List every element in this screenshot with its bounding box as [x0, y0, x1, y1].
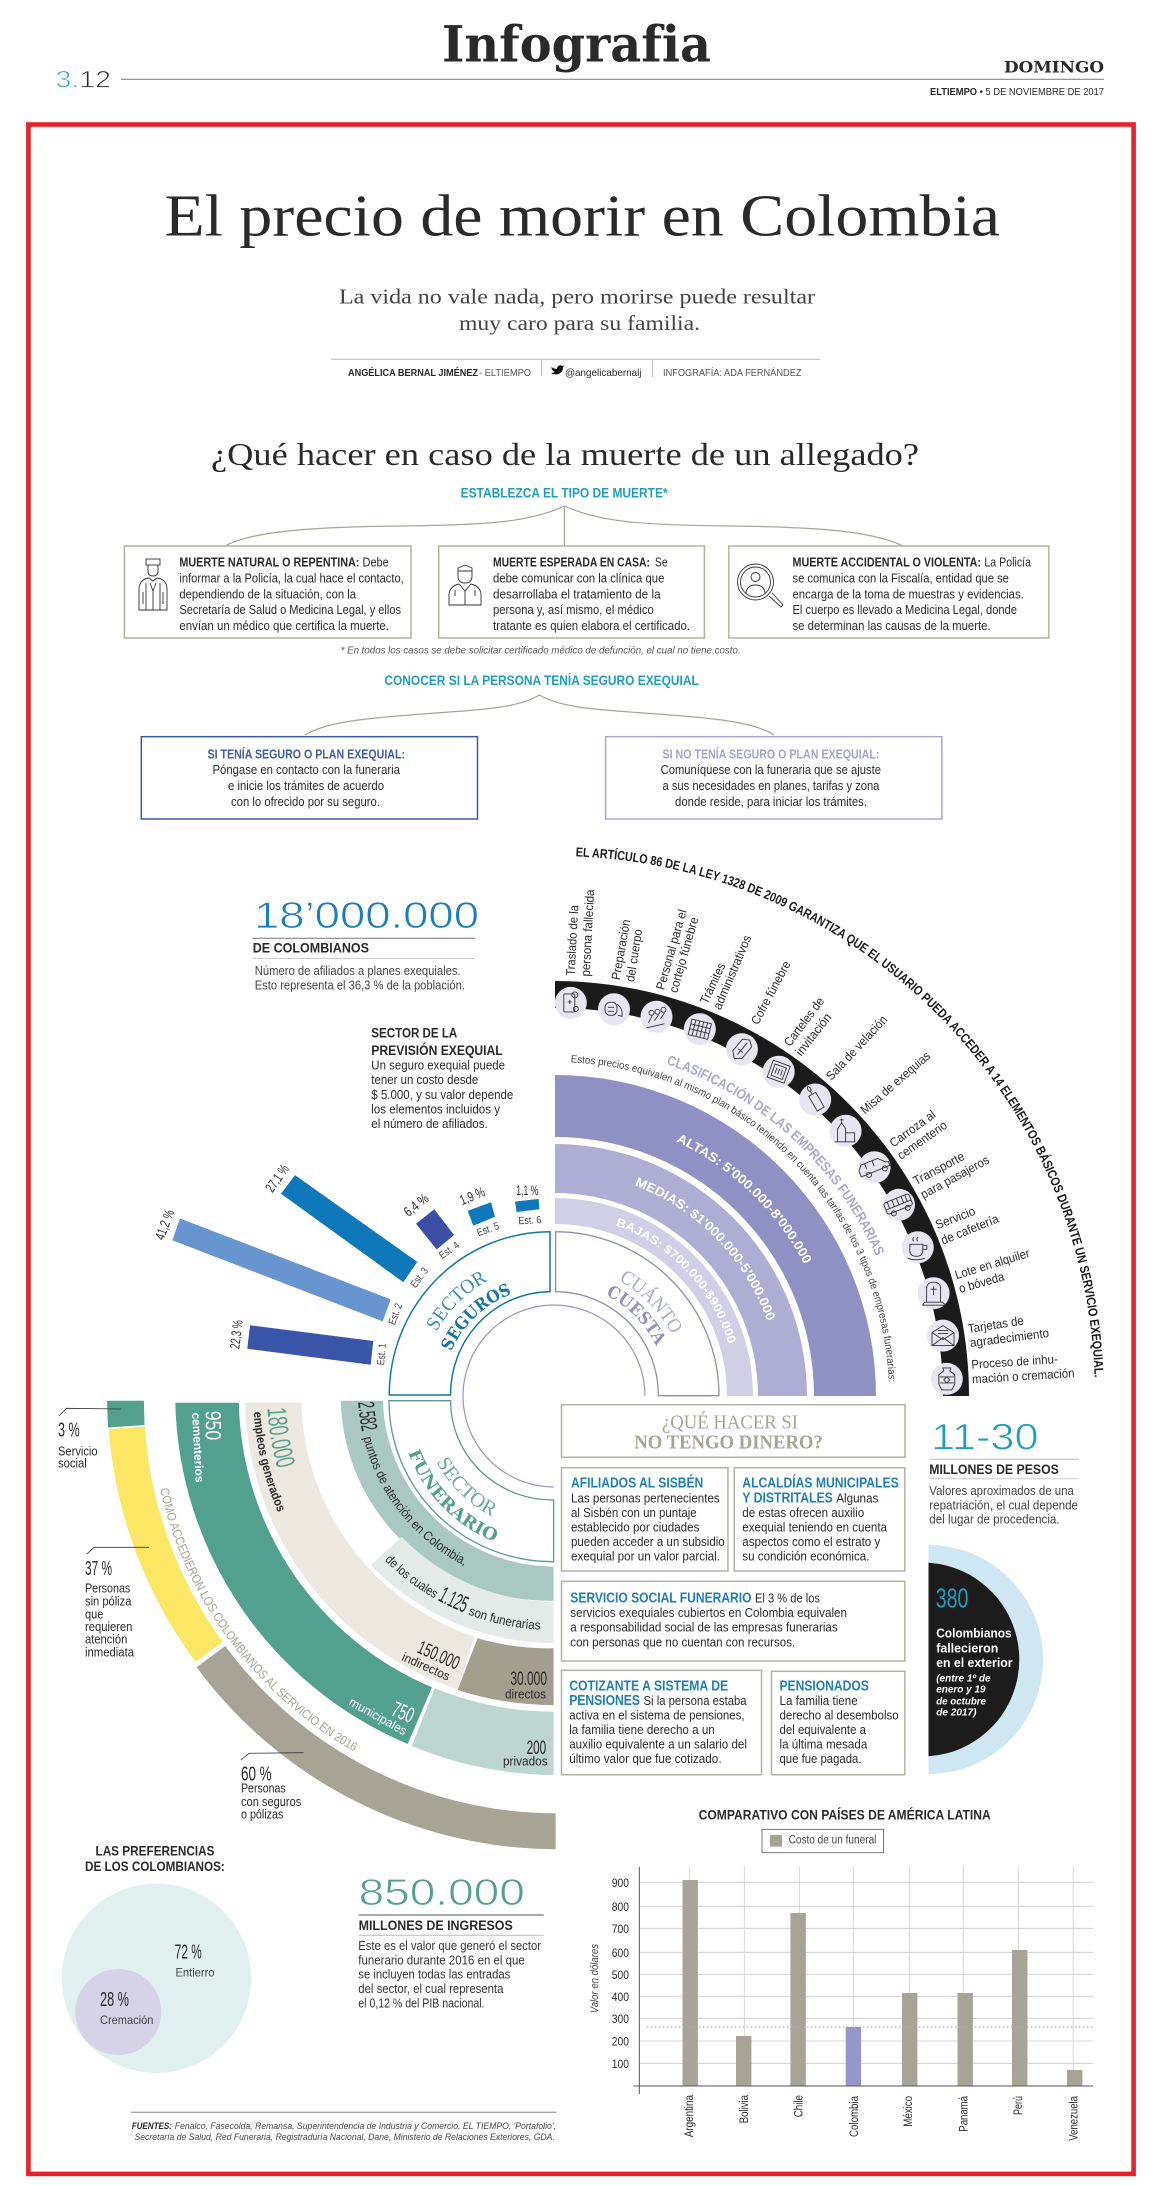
ring: empleos generados [245, 1402, 554, 1705]
panel: con seguro: con lo ofrecido por su seguro. [231, 795, 380, 809]
label: preparación [609, 918, 645, 983]
y axis title: Valor en dólares [589, 1944, 601, 2013]
connector: two branches [305, 695, 774, 735]
callout: 3 %: social [58, 1457, 87, 1471]
panel: muerte esperada: debe comunicar con la clínica que [493, 572, 664, 586]
icon: traslado [555, 987, 587, 1019]
stat: 850.000 millones: del sector, el cual representa [358, 1982, 503, 1996]
sector: funerario: FUNERARIO [408, 1448, 498, 1540]
stat: 11-30 millones [929, 1416, 1079, 1527]
box: pensionados: que fue pagada. [780, 1751, 862, 1766]
icon: tarjeta [927, 1320, 959, 1352]
half circle: 380 colombianos: de 2017) [936, 1707, 977, 1719]
byline [331, 359, 820, 379]
text: sector previsión exequial [371, 1026, 513, 1131]
ring: cementerios: 750 [388, 1696, 418, 1728]
footnote: * En todos los casos se debe solicitar certificado médico de defunción, el cual no tiene costo. [341, 644, 741, 656]
label: trámites: administrativos [710, 933, 754, 1012]
y axis labels: 300 [612, 2014, 629, 2026]
day label: DOMINGO [1004, 58, 1104, 77]
icon: twitter bird [550, 365, 564, 374]
box: cotizante: Si la persona estaba [644, 1693, 747, 1708]
stat: 18 millones: Número de afiliados a planes exequiales. [255, 964, 461, 978]
rings: costos [555, 1075, 876, 1396]
y axis labels: 800 [612, 1902, 629, 1914]
half circle: 380 colombianos: en el exterior [936, 1656, 1013, 1670]
ring: puntos de atención: son funerarias [468, 1608, 540, 1630]
sector: funerario [388, 1400, 554, 1562]
sources: Fenalco, Fasecolda, Remansa, Superintendencia de Industria y Comercio, EL TIEMPO, 'Portafolio', [175, 2121, 556, 2132]
icon: preparación [598, 993, 630, 1025]
stat: 18 millones: DE COLOMBIANOS [253, 941, 369, 956]
panel: muerte accidental: se comunica con la Fiscalía, entidad que se [792, 572, 1009, 586]
label: tarjetas: agradecimiento [969, 1326, 1050, 1350]
half circle: 380 colombianos: enero y 19 [936, 1684, 986, 1696]
box: servicio social funerario: con personas que no cuentan con recursos. [570, 1634, 795, 1649]
ring: cómo accedieron: CÓMO ACCEDIERON LOS COLOMBIANOS AL SERVICIO EN 2016 [160, 1488, 358, 1750]
label: lote [953, 1246, 1031, 1296]
callout: 37 %: 37 % [85, 1558, 112, 1580]
sector: cuánto cuesta: CUÁNTO [622, 1272, 682, 1332]
center arc [463, 1305, 645, 1487]
callout: 37 %: atención [85, 1633, 127, 1647]
y axis labels: 100 [612, 2059, 629, 2071]
ring: medias [555, 1144, 807, 1396]
box: afiliados al sisbén: al Sisbén con un puntaje [571, 1505, 697, 1520]
panel: con seguro: Póngase en contacto con la funeraria [212, 763, 400, 777]
heading: qué hacer: ¿Qué hacer en caso de la muerte de un allegado? [211, 436, 919, 472]
ring: empleos generados: 180.000 [268, 1408, 295, 1467]
bar: estrato 4 [400, 1190, 462, 1262]
circle: cremación [75, 1969, 161, 2055]
box: alcaldías: su condición económica. [742, 1549, 870, 1564]
label: proceso [971, 1352, 1075, 1386]
panel: muerte natural: Debe [362, 556, 389, 570]
label: cafetería: de cafetería [939, 1212, 1001, 1247]
country labels: Argentina [684, 2094, 696, 2137]
box: servicio social funerario: El 3 % de los [755, 1591, 820, 1606]
subtitle: La vida no vale nada, pero morirse puede resultar [339, 284, 815, 308]
icon: lápida [918, 1277, 950, 1309]
panel: muerte natural: dependiendo de la situación, con la [179, 587, 356, 601]
panel: sin seguro [606, 737, 942, 819]
ring: puntos de atención: puntos de atención en Colombia, [361, 1436, 464, 1566]
panel: qué hacer si no tengo dinero [562, 1405, 905, 1775]
panel: muerte natural: informar a la Policía, la cual hace el contacto, [179, 572, 404, 586]
sector: cuánto cuesta [555, 1231, 720, 1396]
ring: medias: MEDIAS: $1'000.000-5'000.000 [635, 1177, 775, 1320]
label: traslado [564, 889, 597, 977]
chart: preferencias: LAS PREFERENCIAS [96, 1843, 214, 1859]
box: cotizante: auxilio equivalente a un salario del [569, 1737, 747, 1752]
box: pensionados: PENSIONADOS [780, 1679, 869, 1695]
box: cotizante: COTIZANTE A SISTEMA DE [569, 1679, 728, 1695]
ring: altas: ALTAS: 5'000.000-8'000.000 [676, 1135, 811, 1263]
label: trámites: Trámites [697, 961, 728, 1006]
bar: estrato 6: Est. 6 [518, 1214, 542, 1227]
icon: urna [931, 1363, 963, 1395]
stat: 18 millones [252, 895, 479, 992]
country labels: Panamá [959, 2096, 971, 2132]
label: transporte: para pasajeros [918, 1153, 992, 1202]
ring: altas [555, 1075, 876, 1396]
date label: ELTIEMPO • 5 DE NOVIEMBRE DE 2017 [930, 87, 1104, 98]
heading box: NO TENGO DINERO? [634, 1431, 823, 1453]
box: alcaldías: de estas ofrecen auxilio [742, 1505, 864, 1520]
box: cotizante: último valor que fue cotizado. [569, 1751, 722, 1766]
sector: seguros: SECTOR [427, 1272, 488, 1330]
axes [634, 1867, 1093, 2094]
box: afiliados al sisbén: AFILIADOS AL SISBÉN [571, 1475, 703, 1492]
half circle: 380 colombianos: de octubre [936, 1695, 986, 1707]
text: sector previsión exequial: los elementos incluidos y [371, 1102, 501, 1116]
label: cofre: Cofre fúnebre [748, 958, 794, 1027]
country labels: Bolivia [739, 2095, 751, 2123]
callout: 60 %: o pólizas [241, 1807, 283, 1821]
bar: estrato 1: 22,3 % [226, 1319, 246, 1350]
chart: preferencias: DE LOS COLOMBIANOS: [85, 1858, 225, 1874]
box: pensionados [772, 1671, 905, 1775]
icon: personal [640, 1001, 672, 1033]
label: personal: Personal para el [653, 908, 690, 991]
ring: empleos generados: 30.000 [510, 1669, 547, 1690]
box: afiliados al sisbén: pueden acceder a un subsidio [571, 1534, 725, 1549]
callout: 60 % [241, 1753, 304, 1821]
y axis labels: 400 [612, 1992, 629, 2004]
half circle: 380 colombianos: 380 [936, 1582, 968, 1613]
panel: muerte accidental: se determinan las causas de la muerte. [792, 619, 991, 633]
grid [639, 1867, 1093, 2086]
circle: cremación: 28 % [100, 1989, 129, 2011]
panel: muerte natural: Secretaría de Salud o Medicina Legal, y ellos [179, 603, 401, 617]
ring: bajas [555, 1198, 753, 1396]
bar: estrato 3: 27,1 % [262, 1161, 292, 1195]
sector: cuánto cuesta: CUESTA [608, 1286, 664, 1346]
bar: estrato 2: 41,2 % [151, 1207, 177, 1242]
box: afiliados al sisbén: establecido por ciudades [571, 1520, 700, 1535]
stat: 11-30 millones: 11-30 [931, 1416, 1038, 1457]
sector: seguros: SEGUROS [441, 1284, 510, 1350]
heading: artículo 86 curved: EL ARTÍCULO 86 DE LA LEY 1328 DE 2009 GARANTIZA QUE EL USUARIO PUEDA ACCEDER A 14 ELEMENTOS BÁSICOS DURANTE UN SERVICIO EXEQUIAL. [576, 848, 1104, 1377]
box: alcaldías: Y DISTRITALES [742, 1490, 833, 1506]
ring: puntos de atención: de los cuales [386, 1556, 437, 1598]
box: afiliados al sisbén: Las personas pertenecientes [571, 1491, 720, 1506]
icon: vela [793, 1078, 837, 1121]
callout: 37 % [85, 1547, 149, 1659]
icon: iglesia [830, 1115, 862, 1147]
panel: muerte natural [124, 546, 411, 638]
ring: cementerios: privados [503, 1754, 548, 1769]
bar: estrato 5: 1,9 % [457, 1183, 487, 1208]
legend: Costo de un funeral [789, 1834, 876, 1846]
heading: clasificación curved: CLASIFICACIÓN DE LAS EMPRESAS FUNERARIAS [668, 1056, 884, 1256]
stat: 850.000 millones: MILLONES DE INGRESOS [359, 1918, 513, 1933]
y axis labels: 600 [612, 1948, 629, 1960]
label: cafetería: Servicio [933, 1204, 977, 1232]
label: carroza: Carroza al [887, 1107, 938, 1150]
panel: con seguro: e inicie los trámites de acuerdo [228, 779, 384, 793]
panel: muerte esperada: persona y, así mismo, el médico [493, 603, 654, 617]
label: tarjetas: Tarjetas de [967, 1314, 1025, 1336]
half circle: 380 colombianos: Colombianos [936, 1627, 1012, 1641]
box: cotizante [562, 1670, 762, 1775]
icon: bus [878, 1184, 920, 1226]
ring: empleos generados: empleos generados [252, 1412, 284, 1512]
callout: 37 %: Personas [85, 1582, 130, 1596]
y axis labels: 200 [612, 2036, 629, 2048]
icons: fourteen elements [555, 987, 963, 1395]
chart: estratos radial bars [151, 1161, 542, 1366]
label: lote: o bóveda [957, 1270, 1006, 1296]
stat: 850.000 millones: el 0,12 % del PIB nacional. [358, 1996, 484, 2010]
panel: muerte esperada: Se [655, 556, 668, 570]
label: transporte: Transporte [911, 1149, 967, 1188]
box: pensionados: la última mesada [780, 1737, 868, 1752]
heading box [562, 1405, 905, 1457]
callout: 60 %: con seguros [241, 1795, 301, 1809]
ring: puntos de atención: 2.582 [358, 1402, 378, 1432]
callout: 60 %: Personas [241, 1782, 286, 1796]
box: servicio social funerario [562, 1581, 905, 1661]
stat: 850.000 millones: funerario durante 2016 en el que [358, 1953, 525, 1967]
bars [682, 1880, 1082, 2086]
connector: three branches [225, 506, 903, 546]
y axis labels: 900 [612, 1878, 629, 1890]
label: proceso: Proceso de inhu- [971, 1352, 1058, 1372]
callout: 37 %: que [85, 1607, 103, 1621]
box: servicio social funerario: SERVICIO SOCIAL FUNERARIO [570, 1591, 752, 1607]
country labels: Perú [1013, 2096, 1025, 2115]
stat: 11-30 millones: repatriación, el cual depende [929, 1498, 1078, 1512]
circle: cremación: Cremación [100, 2013, 153, 2027]
chart: comparativo américa latina [589, 1806, 1093, 2141]
ring: cementerios: cementerios [189, 1412, 207, 1483]
stat: 850.000 millones: Este es el valor que generó el sector [358, 1939, 541, 1953]
label: preparación: del cuerpo [623, 928, 645, 983]
byline: - ELTIEMPO [479, 367, 531, 379]
callout: 60 %: 60 % [241, 1764, 272, 1786]
ring: empleos generados: indirectos [400, 1650, 452, 1683]
panel: muerte accidental: El cuerpo es llevado a Medicina Legal, donde [792, 603, 1017, 617]
half circle: 380 colombianos: (entre 1º de [936, 1673, 991, 1685]
subtitle: muy caro para su familia. [459, 311, 700, 335]
box: afiliados al sisbén [562, 1468, 728, 1571]
panel: sin seguro: donde reside, para iniciar los trámites. [675, 795, 867, 809]
byline: INFOGRAFÍA: ADA FERNÁNDEZ [663, 366, 802, 379]
sources: Secretaría de Salud, Red Funeraria, Registraduría Nacional, Dane, Ministerio de Relaciones Exteriores, GDA. [134, 2132, 555, 2143]
bar: estrato 5 [457, 1183, 501, 1239]
panel: muerte esperada: MUERTE ESPERADA EN CASA: [493, 556, 650, 570]
byline: ANGÉLICA BERNAL JIMÉNEZ [348, 366, 479, 379]
text: sector previsión exequial: tener un costo desde [371, 1073, 478, 1087]
label: traslado: Traslado de la [564, 905, 581, 976]
panel: muerte natural: envían un médico que certifica la muerte. [179, 619, 389, 633]
subtitle [339, 284, 815, 335]
panel: muerte natural: MUERTE NATURAL O REPENTINA: [179, 556, 359, 570]
sources: FUENTES: [132, 2121, 172, 2132]
bar: estrato 3: Est. 3 [408, 1265, 431, 1290]
stat: 850.000 millones: 850.000 [359, 1872, 525, 1913]
panel: muerte accidental: encarga de la toma de muestras y evidencias. [792, 587, 1024, 601]
box: pensionados: derecho al desembolso [780, 1707, 899, 1722]
country labels: Venezuela [1069, 2095, 1081, 2141]
ring: cementerios: 200 [527, 1738, 546, 1759]
y axis labels [612, 1878, 629, 2071]
box: afiliados al sisbén: exequial por un valor parcial. [571, 1549, 720, 1564]
panel: muerte esperada: desarrollaba el tratamiento de la [493, 587, 661, 601]
bar: estrato 6: 1,1 % [516, 1182, 538, 1198]
chart title: COMPARATIVO CON PAÍSES DE AMÉRICA LATINA [699, 1806, 991, 1822]
half circle: 380 colombianos: fallecieron [936, 1641, 998, 1655]
callout: 37 %: inmediata [85, 1645, 134, 1659]
callout: 3 %: Servicio [58, 1445, 98, 1459]
icon: trámites [680, 1010, 719, 1049]
bar: estrato 3 [262, 1161, 431, 1290]
sector: seguros [388, 1231, 551, 1396]
ring: puntos de atención: 1.125 [438, 1588, 470, 1612]
panel: sin seguro: SI NO TENÍA SEGURO O PLAN EXEQUIAL: [662, 746, 879, 761]
box: alcaldías [734, 1468, 905, 1571]
bar: estrato 2 [151, 1207, 405, 1327]
text: sector previsión exequial: el número de afiliados. [371, 1117, 488, 1131]
label: carteles: invitación [793, 1011, 834, 1059]
panel: sin seguro: a sus necesidades en planes, tarifas y zona [662, 779, 879, 793]
box: servicio social funerario: a responsabilidad social de las empresas funerarias [570, 1620, 838, 1635]
label: personal: cortejo fúnebre [666, 915, 701, 994]
country labels: Colombia [849, 2095, 861, 2137]
label: carteles: Carteles de [781, 995, 827, 1049]
bar: estrato 2: Est. 2 [386, 1302, 405, 1327]
callout: 37 %: sin póliza [85, 1594, 131, 1608]
icon: magnifier with person [738, 564, 783, 607]
sector: funerario: SECTOR [438, 1458, 496, 1516]
heading box: ¿QUÉ HACER SI [662, 1410, 798, 1433]
ring: cementerios: municipales [347, 1695, 409, 1738]
main title: El precio de morir en Colombia [164, 183, 1000, 249]
label: sala: Sala de velación [823, 1013, 890, 1083]
bar: estrato 4: 6,4 % [400, 1190, 431, 1220]
icon: carteles [758, 1051, 799, 1092]
panel: muerte accidental [729, 546, 1049, 638]
ring: cómo accedieron [107, 1400, 556, 1850]
panel: muerte esperada [439, 546, 704, 638]
icon: carroza [854, 1146, 895, 1188]
country labels: Chile [794, 2095, 806, 2117]
panel: con seguro: SI TENÍA SEGURO O PLAN EXEQUIAL: [208, 746, 405, 761]
bar: estrato 5: Est. 5 [475, 1220, 501, 1239]
stat: 18 millones: 18’000.000 [254, 895, 479, 936]
callout: 3 %: 3 % [58, 1420, 80, 1442]
ring: bajas: BAJAS: $700.000-$900.000 [616, 1218, 736, 1343]
text: sector previsión exequial: SECTOR DE LA [371, 1026, 458, 1041]
ring: puntos de atención [340, 1400, 554, 1643]
panel: con seguro [141, 737, 478, 819]
page number: 3.12 [56, 67, 111, 94]
country labels: México [903, 2096, 915, 2127]
y axis labels: 500 [612, 1970, 629, 1982]
box: cotizante: la familia tiene derecho a un [569, 1722, 715, 1737]
label: tarjetas [967, 1314, 1050, 1350]
callout: 37 %: requieren [85, 1620, 132, 1634]
panel: muerte accidental: La Policía [984, 556, 1031, 570]
panel: sin seguro: Comuníquese con la funeraria que se ajuste [661, 763, 881, 777]
note: precios curved: Estos precios equivalen al mismo plan básico teniendo en cuenta las tarifas de los 3 tipos de empresas funerarias: [571, 1055, 896, 1382]
bar: estrato 1 [226, 1319, 389, 1366]
box: servicio social funerario: servicios exequiales cubiertos en Colombia equivalen [570, 1605, 847, 1620]
text: sector previsión exequial: Un seguro exequial puede [371, 1059, 505, 1073]
label: preparación: Preparación [609, 918, 633, 981]
label: misa: Misa de exequias [858, 1049, 933, 1117]
box: alcaldías: aspectos como el estrato y [742, 1534, 881, 1549]
bar: estrato 4: Est. 4 [437, 1239, 462, 1262]
stat: 850.000 millones [358, 1872, 544, 2010]
sources [131, 2112, 557, 2143]
label: lote: Lote en alquiler [953, 1246, 1031, 1282]
box: alcaldías: exequial teniendo en cuenta [742, 1520, 888, 1535]
bar: estrato 6 [515, 1182, 542, 1227]
subheading: seguro exequial: CONOCER SI LA PERSONA TENÍA SEGURO EXEQUIAL [384, 673, 699, 688]
box: alcaldías: Algunas [836, 1491, 879, 1506]
text: sector previsión exequial: PREVISIÓN EXEQUIAL [371, 1043, 503, 1058]
label: traslado: persona fallecida [579, 889, 597, 977]
box: cotizante: activa en el sistema de pensiones, [569, 1707, 745, 1722]
stat: 18 millones: Esto representa el 36,3 % de la población. [255, 978, 465, 992]
half circle: 380 colombianos [928, 1545, 1043, 1774]
circle: entierro: Entierro [176, 1966, 215, 1980]
icon: doctor [449, 565, 481, 605]
icon: café [902, 1231, 934, 1263]
panel: muerte esperada: tratante es quien elabora el certificado. [493, 619, 690, 633]
labels: fourteen elements [564, 889, 1075, 1386]
box: alcaldías: ALCALDÍAS MUNICIPALES [742, 1475, 899, 1492]
label: proceso: mación o cremación [972, 1366, 1075, 1386]
box: pensionados: La familia tiene [780, 1693, 858, 1708]
byline: @angelicabernalj [565, 367, 642, 379]
stat: 11-30 millones: MILLONES DE PESOS [929, 1462, 1059, 1477]
newspaper header [56, 15, 1104, 98]
black arc band [555, 981, 969, 1396]
box: pensionados: del equivalente a [780, 1722, 867, 1737]
stat: 850.000 millones: se incluyen todas las entradas [358, 1968, 510, 1982]
circle: entierro: 72 % [175, 1941, 202, 1963]
y axis labels: 700 [612, 1924, 629, 1936]
section title: Infografia [442, 15, 711, 74]
box: cotizante: PENSIONES [569, 1693, 640, 1709]
stat: 11-30 millones: del lugar de procedencia. [929, 1513, 1060, 1527]
subheading: tipo de muerte: ESTABLEZCA EL TIPO DE MUERTE* [461, 485, 668, 500]
chart: preferencias [62, 1843, 251, 2073]
country labels [684, 2094, 1081, 2141]
legend [762, 1829, 884, 1853]
panel: muerte accidental: MUERTE ACCIDENTAL O VIOLENTA: [792, 556, 981, 570]
ring: empleos generados: 150.000 [414, 1637, 463, 1674]
label: carroza: cementerio [895, 1118, 950, 1162]
icon: cofre [719, 1027, 764, 1072]
ring: cementerios: 950 [201, 1411, 226, 1440]
stat: 11-30 millones: Valores aproximados de una [929, 1484, 1074, 1498]
bar: estrato 1: Est. 1 [375, 1343, 389, 1366]
ring: cementerios [175, 1403, 554, 1775]
circle: entierro [62, 1884, 251, 2073]
icon: policeman [139, 559, 167, 610]
callout: 3 % [58, 1408, 121, 1471]
ring: empleos generados: directos [505, 1686, 546, 1701]
text: sector previsión exequial: $ 5.000, y su valor depende [371, 1088, 513, 1102]
